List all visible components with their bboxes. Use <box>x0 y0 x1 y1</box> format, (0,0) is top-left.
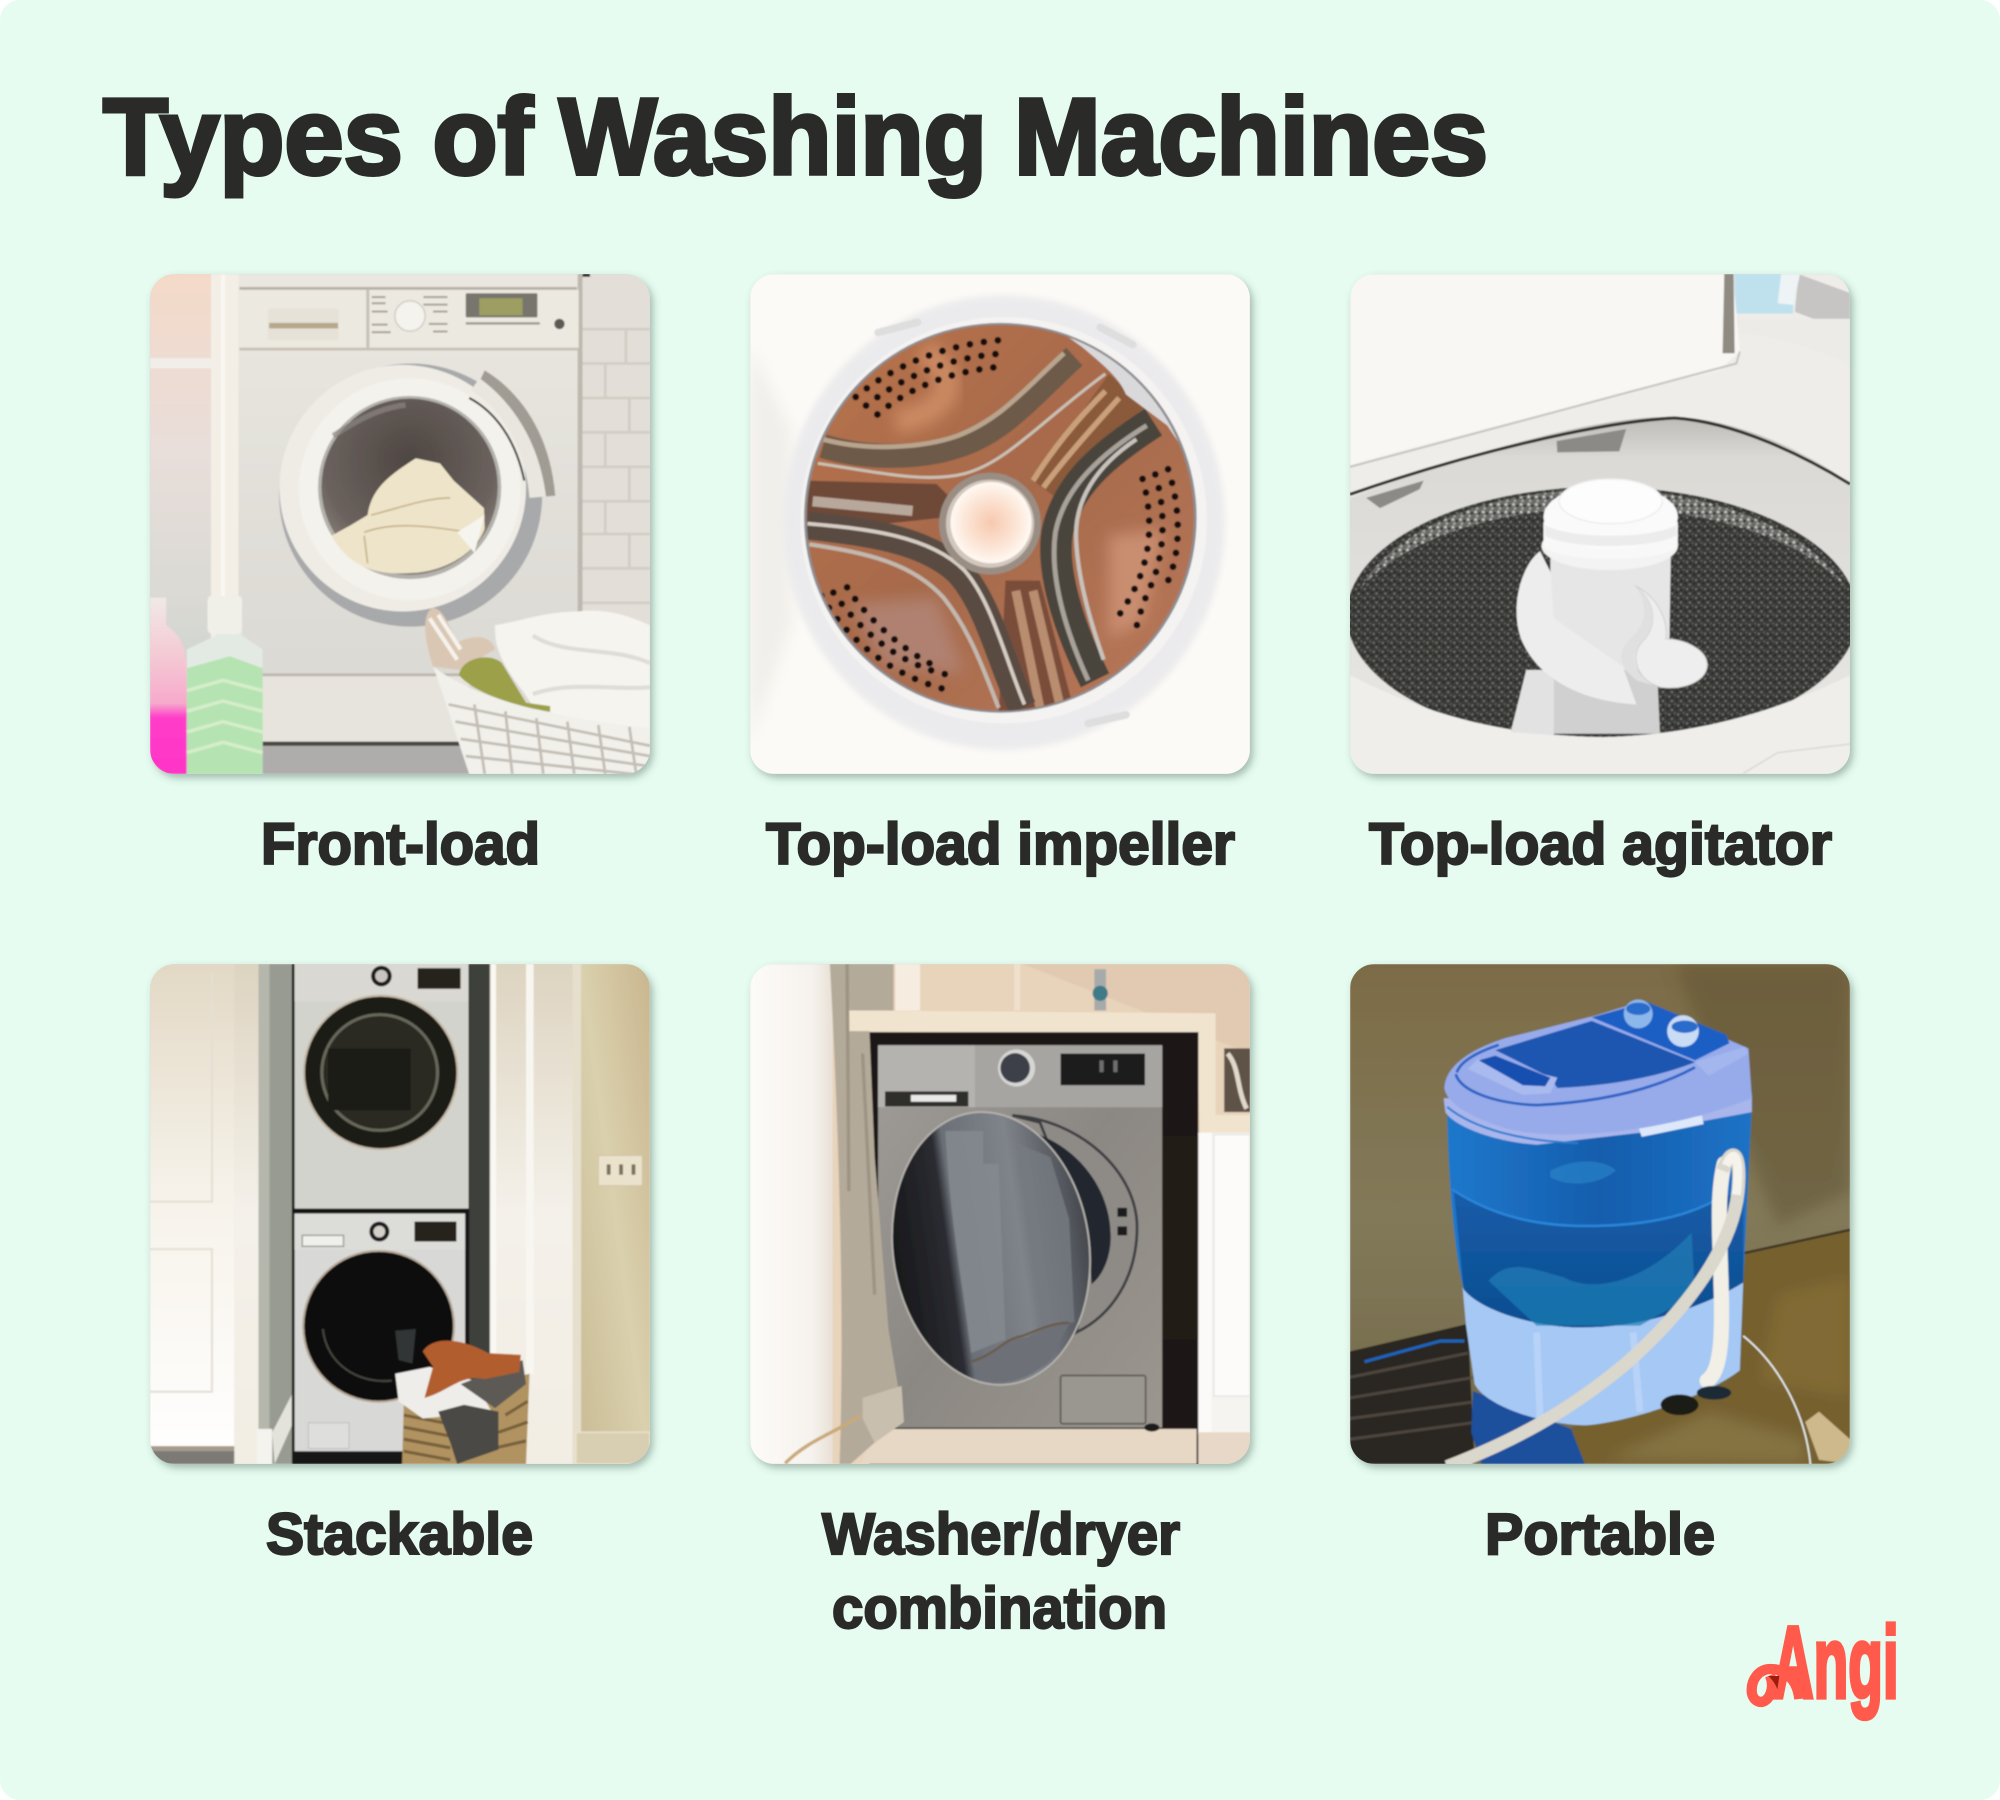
label: Stackable <box>266 1502 533 1567</box>
label: Top-load impeller <box>766 812 1235 877</box>
photo: washer/dryer combo with open door <box>750 964 1250 1466</box>
photo: impeller drum <box>750 274 1250 774</box>
panel: stackable <box>150 964 650 1567</box>
panel: portable <box>1350 964 1850 1567</box>
label: Front-load <box>261 812 540 877</box>
panel: front-load <box>150 274 650 877</box>
label: two lines <box>822 1502 1180 1641</box>
title: Types of <box>103 76 534 198</box>
photo: front-load washer <box>150 274 650 774</box>
photo: agitator tub <box>1347 274 1858 774</box>
title: Machines <box>1014 76 1488 198</box>
label: Portable <box>1485 1502 1715 1567</box>
photo: portable blue washer <box>1350 964 1850 1467</box>
photo: stacked washer and dryer <box>150 964 650 1464</box>
label: Top-load agitator <box>1369 812 1832 877</box>
label: two lines: combination <box>832 1576 1167 1641</box>
panel: top-load impeller <box>750 274 1250 877</box>
panel: top-load agitator <box>1347 274 1858 877</box>
title <box>103 76 1488 198</box>
panel: washer/dryer combination <box>750 964 1250 1641</box>
title: Washing <box>559 76 987 198</box>
label: two lines: Washer/dryer <box>822 1502 1180 1567</box>
